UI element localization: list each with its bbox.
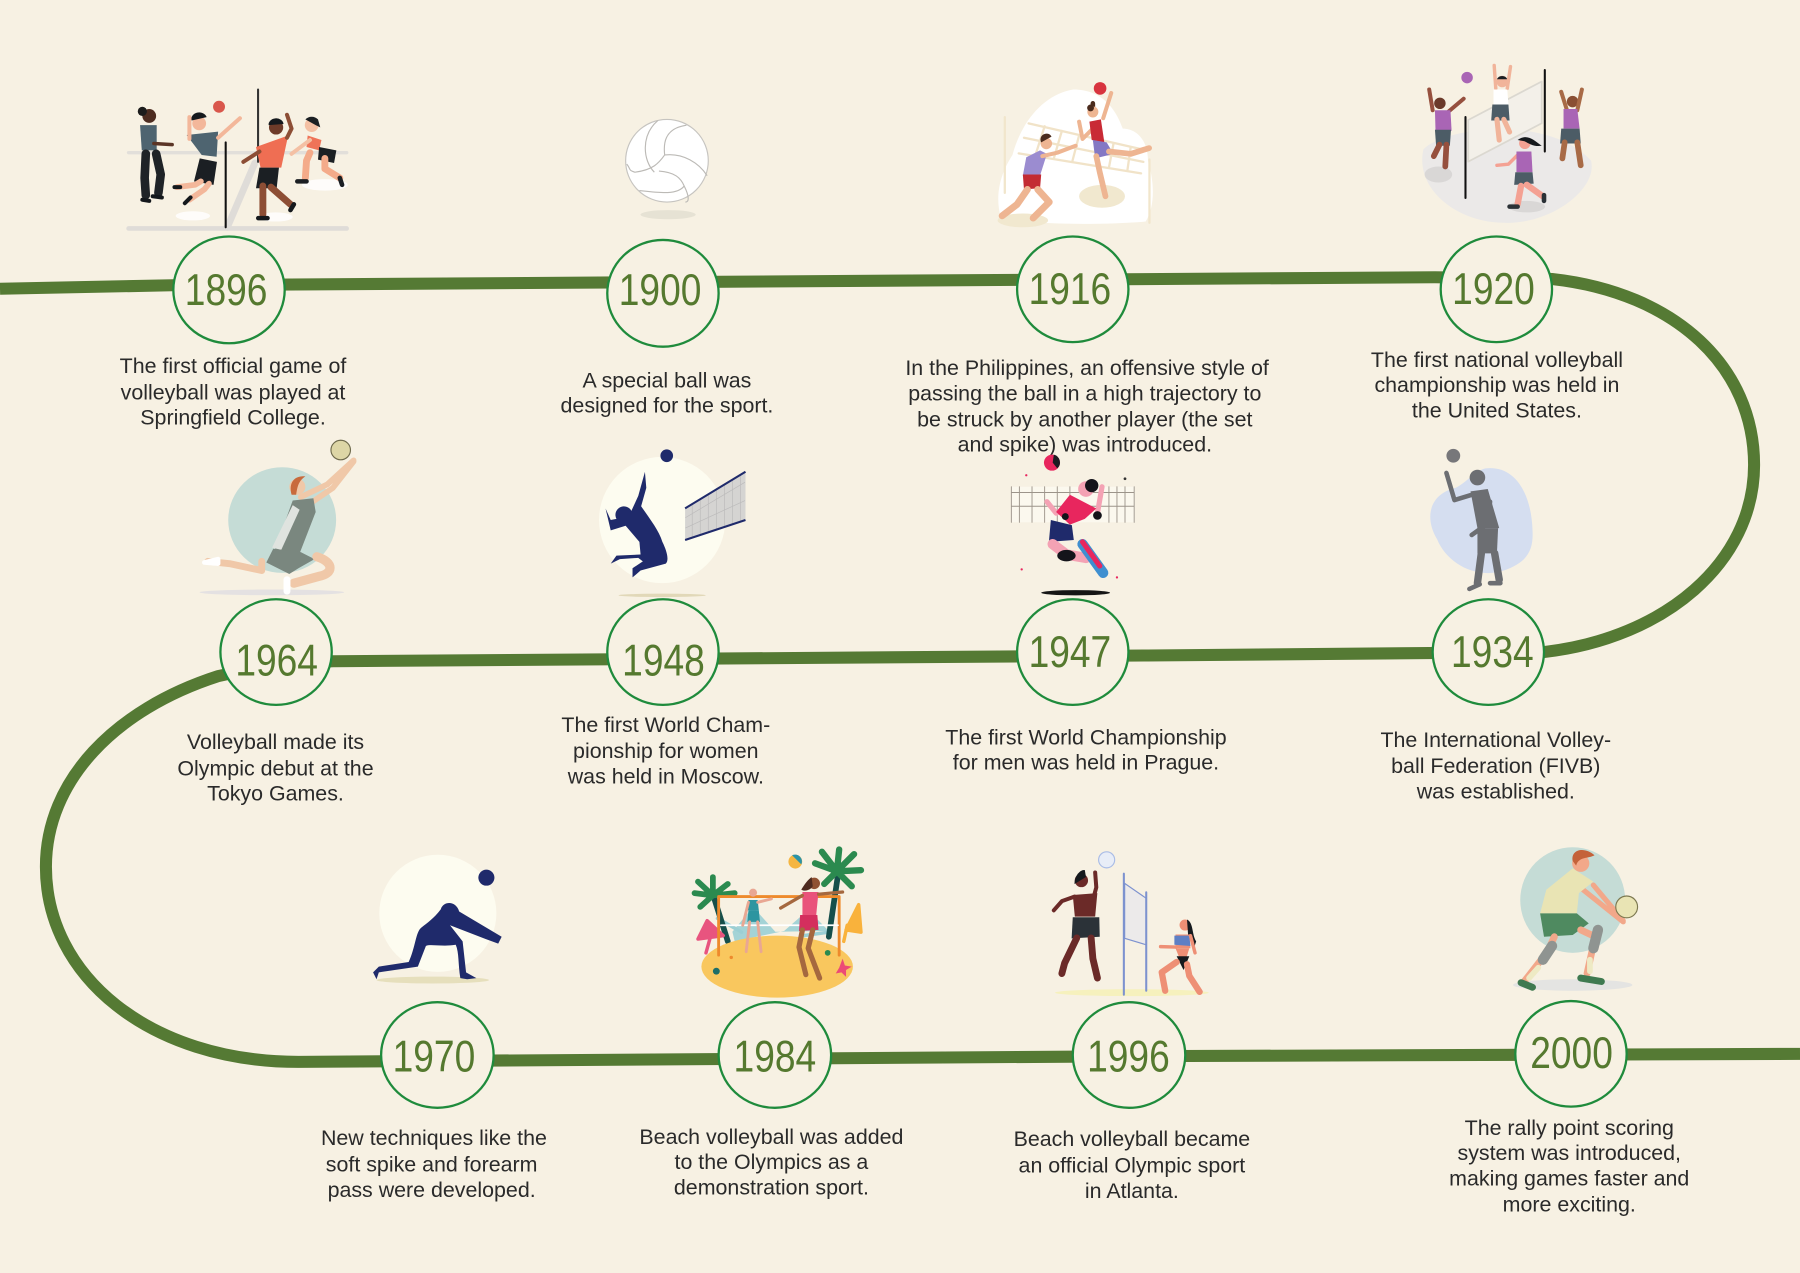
icon: woman silhouette spiking	[599, 449, 745, 597]
icon: player receiving the ball	[1513, 847, 1638, 991]
description 1916: passing the ball in a high trajectory to	[908, 382, 1261, 406]
description 1916: In the Philippines, an offensive style of	[905, 356, 1269, 380]
description 1934: ball Federation (FIVB)	[1391, 754, 1600, 778]
description 1948: The first World Cham-	[561, 713, 770, 737]
description 1970: New techniques like the	[321, 1126, 547, 1150]
panel: 2000	[1449, 847, 1689, 1217]
year badge 1896: 1896	[185, 266, 267, 315]
woman	[142, 109, 156, 123]
year badge 1934	[1433, 599, 1544, 705]
icon: four players on a court	[1422, 65, 1592, 223]
description 1920: The first national volleyball	[1371, 348, 1623, 372]
year badge 1934: 1934	[1451, 628, 1534, 677]
year badge 2000: 2000	[1530, 1029, 1613, 1078]
year badge 1996	[1073, 1002, 1185, 1108]
panel: 1916	[905, 82, 1269, 457]
year badge 1996: 1996	[1087, 1033, 1170, 1082]
description 2000: more exciting.	[1503, 1193, 1636, 1217]
back woman	[749, 889, 757, 897]
panel: 1984	[639, 850, 903, 1199]
panel: 1996	[1014, 852, 1250, 1203]
description 1984: to the Olympics as a	[675, 1150, 868, 1174]
woman on right	[305, 118, 319, 132]
year badge 1984	[719, 1002, 831, 1108]
icon: man in pink jersey spiking	[1011, 455, 1135, 595]
panel: 1947	[945, 455, 1227, 775]
year badge 1984: 1984	[734, 1033, 816, 1082]
description 1920: the United States.	[1412, 398, 1582, 422]
year badge 1947	[1017, 599, 1128, 705]
description 1984: Beach volleyball was added	[639, 1125, 903, 1149]
icon: beach volleyball scene	[695, 850, 861, 998]
serpentine timeline path	[0, 277, 1800, 1062]
left player	[1434, 98, 1446, 109]
description 1896: volleyball was played at	[121, 380, 345, 404]
icon: two beach players at a net	[998, 82, 1153, 227]
year badge 1916	[1017, 236, 1128, 342]
year badge 1970: 1970	[393, 1033, 475, 1082]
description 1964: Volleyball made its	[187, 730, 364, 754]
year badge 1916: 1916	[1029, 265, 1111, 314]
icon: diving player	[200, 440, 354, 595]
description 1948: was held in Moscow.	[567, 764, 764, 788]
year badge 1920: 1920	[1452, 265, 1535, 314]
description 1996: in Atlanta.	[1085, 1179, 1179, 1203]
jumper	[192, 117, 206, 130]
description 1996: Beach volleyball became	[1014, 1127, 1250, 1151]
description 1900: A special ball was	[583, 368, 751, 392]
icon: four players at a net	[129, 90, 348, 228]
panel: 1964	[177, 440, 374, 806]
panel: 1900	[561, 119, 773, 418]
description 1900: designed for the sport.	[561, 394, 773, 418]
year badge 2000	[1515, 1001, 1627, 1107]
icon: grey silhouette serving	[1430, 449, 1533, 589]
year badge 1964: 1964	[235, 637, 318, 686]
description 1916: and spike) was introduced.	[958, 433, 1212, 457]
description 1970: soft spike and forearm	[326, 1153, 537, 1177]
description 1964: Tokyo Games.	[207, 782, 344, 806]
description 1970: pass were developed.	[328, 1178, 536, 1202]
year badge 1948: 1948	[622, 637, 705, 686]
year badge 1900: 1900	[619, 266, 701, 315]
year badge 1896	[173, 236, 285, 343]
year badge 1920	[1441, 236, 1552, 342]
description 1947: The first World Championship	[945, 725, 1227, 749]
icon: white volleyball	[626, 119, 708, 219]
year badge 1900	[607, 240, 719, 347]
description 1964: Olympic debut at the	[177, 756, 374, 780]
back player	[1496, 76, 1508, 87]
icon: two beach players at a net	[1054, 852, 1209, 996]
description 1996: an official Olympic sport	[1019, 1154, 1245, 1178]
panel: 1970	[321, 855, 547, 1202]
description 2000: making games faster and	[1449, 1166, 1689, 1190]
right player	[1567, 96, 1578, 107]
description 1934: The International Volley-	[1380, 728, 1611, 752]
description 2000: system was introduced,	[1458, 1141, 1681, 1165]
panel: 1920	[1371, 65, 1623, 422]
year badge 1948	[607, 599, 719, 705]
description 1948: pionship for women	[573, 739, 759, 763]
man in orange	[269, 120, 283, 135]
year badge 1970	[381, 1002, 494, 1108]
description 1896: The first official game of	[120, 354, 346, 378]
year badge 1947: 1947	[1029, 628, 1111, 677]
description 1920: championship was held in	[1374, 373, 1619, 397]
panel: 1948	[561, 449, 770, 788]
description 1896: Springfield College.	[140, 406, 326, 430]
description 1916: be struck by another player (the set	[917, 407, 1253, 431]
panel: 1896	[120, 90, 348, 430]
year badge 1964	[220, 599, 332, 705]
icon: silhouette forearm pass	[373, 855, 502, 983]
front player	[1508, 201, 1545, 212]
panel: 1934	[1380, 449, 1611, 803]
description 1947: for men was held in Prague.	[953, 751, 1219, 775]
front woman	[809, 878, 820, 889]
description 1984: demonstration sport.	[674, 1175, 869, 1199]
description 2000: The rally point scoring	[1465, 1116, 1674, 1140]
description 1934: was established.	[1416, 779, 1575, 803]
